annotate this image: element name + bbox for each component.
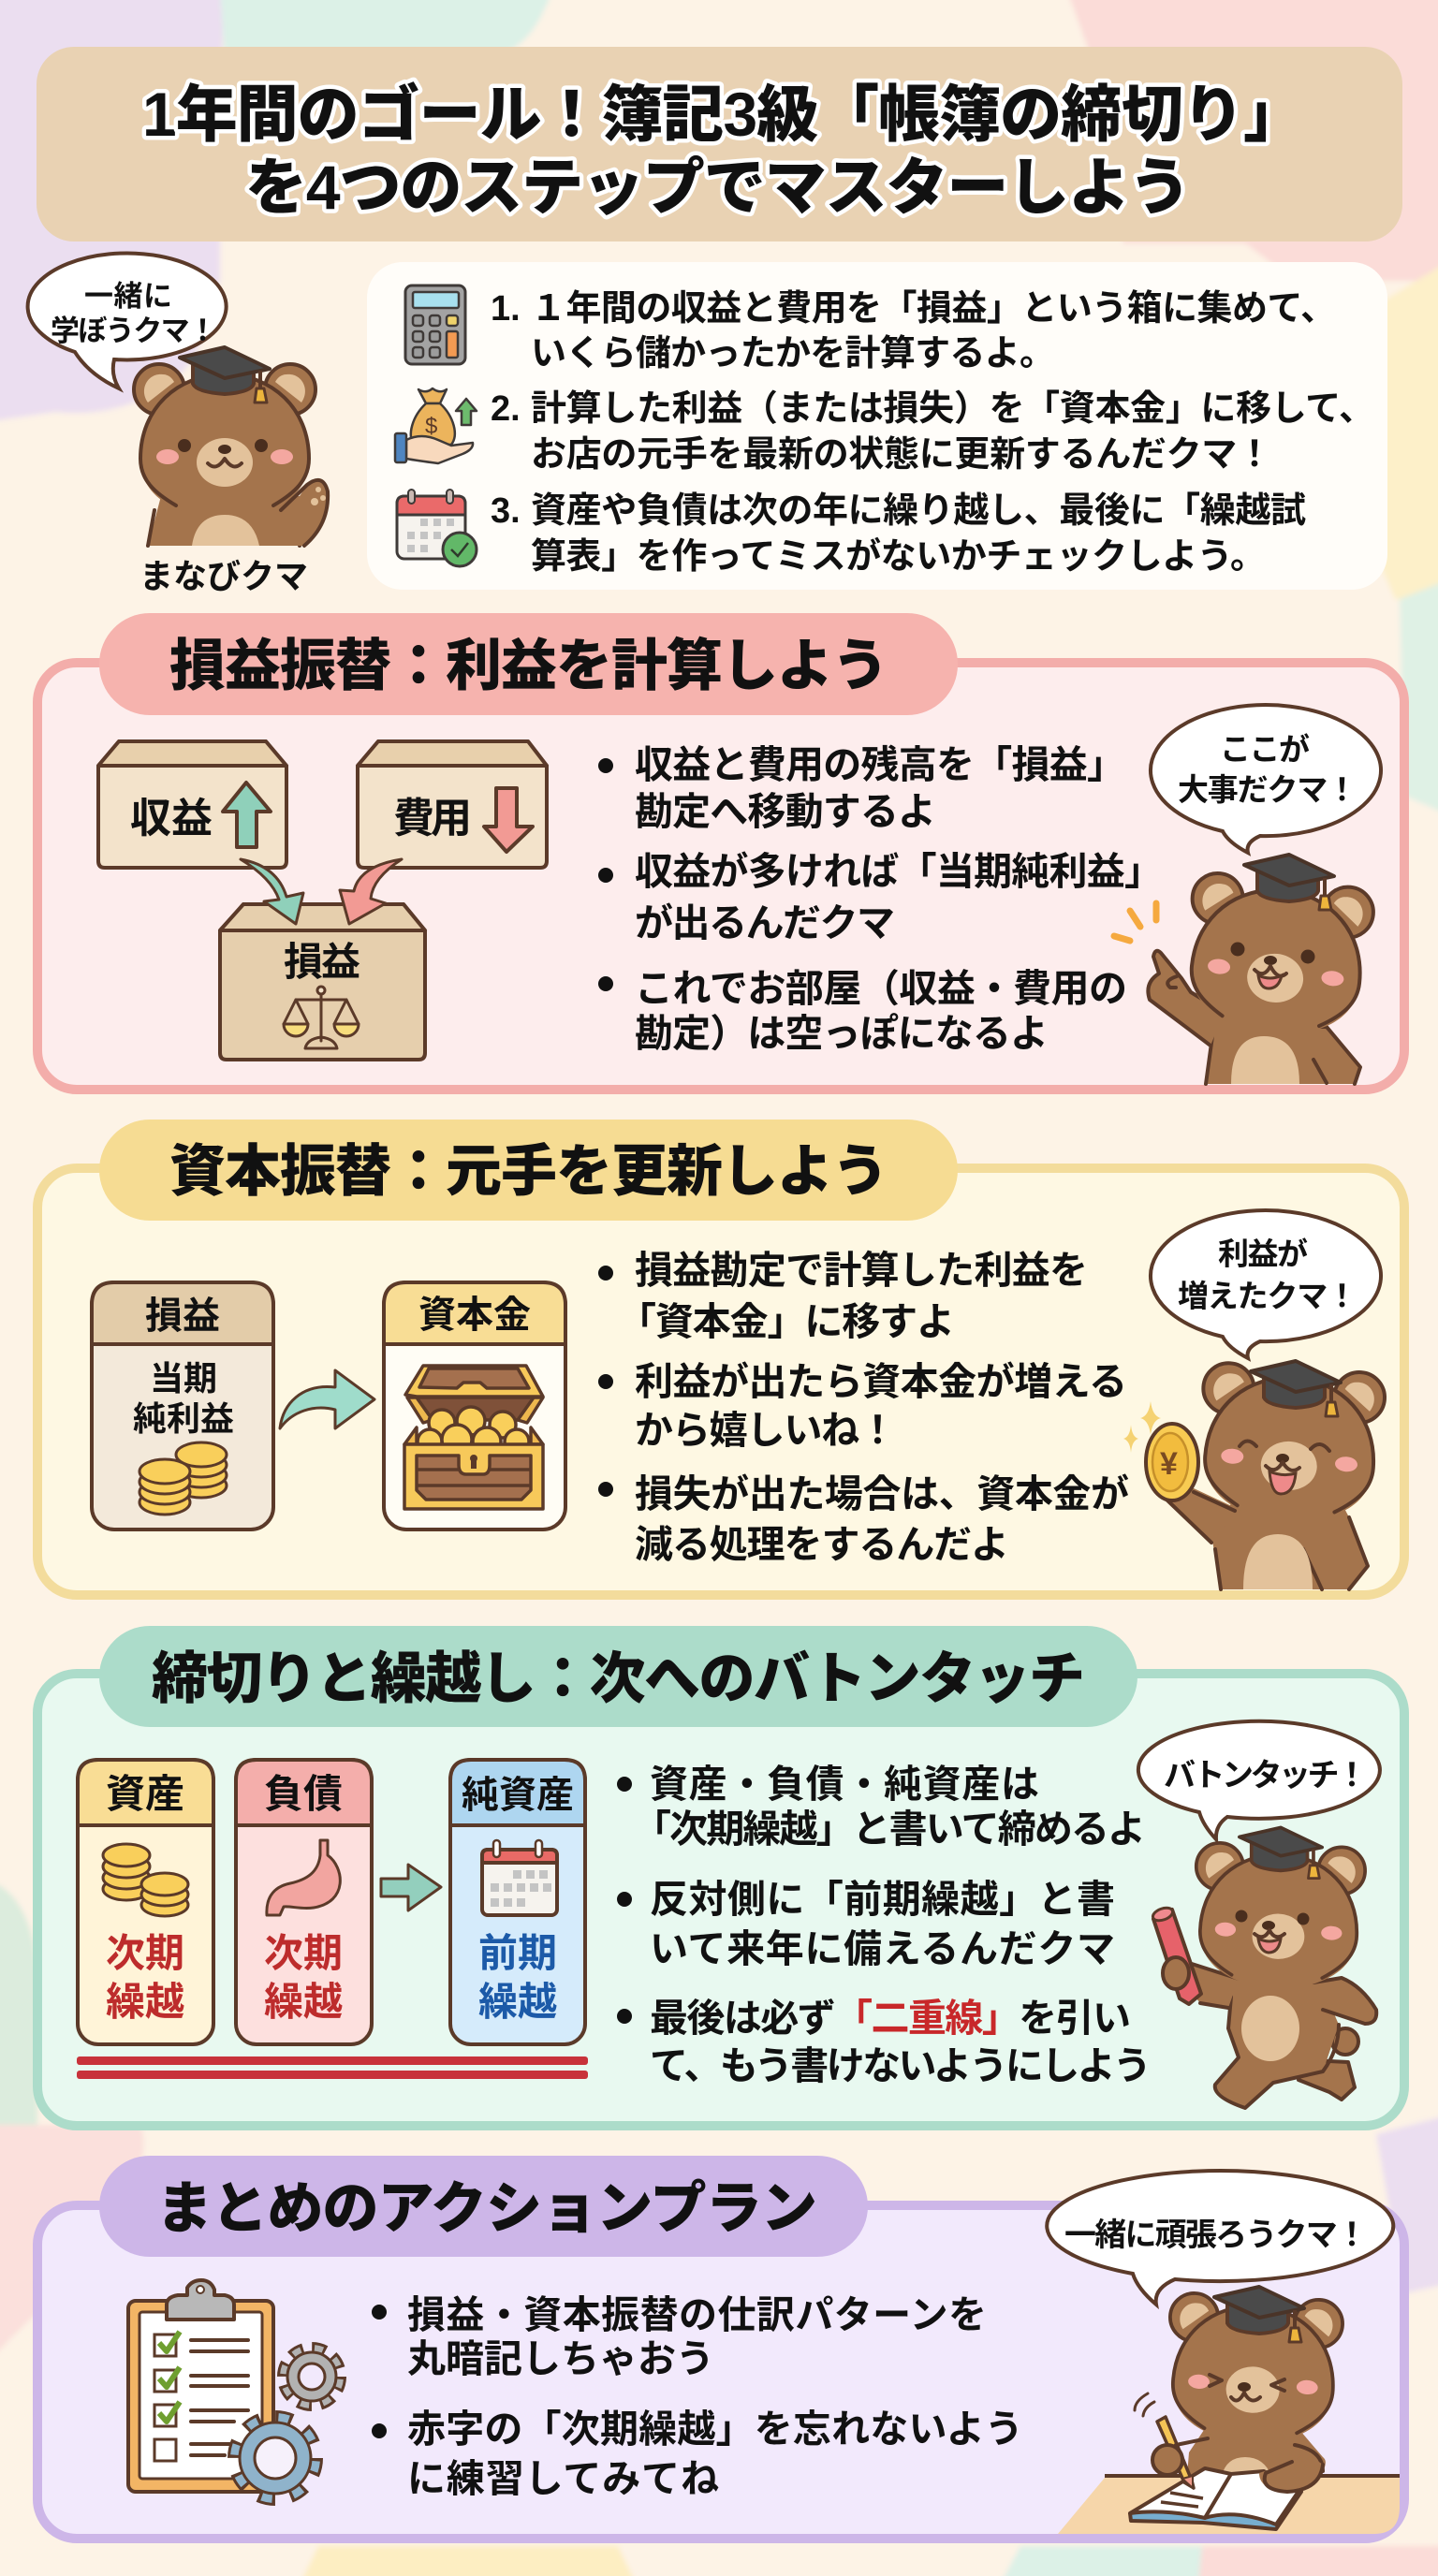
open book (1130, 2468, 1301, 2529)
icon: calculator (405, 285, 465, 364)
icon: calendar check (397, 490, 477, 566)
desk (1058, 2476, 1400, 2534)
bullet list: 「資本金」に移すよ (618, 1300, 955, 1343)
bullet list: に練習してみてね (407, 2457, 719, 2500)
heading pill (99, 1626, 1137, 1727)
arrow: 収益 to 損益 (241, 859, 303, 924)
box: 費用: 費用 (393, 796, 472, 842)
panel 4: まとめ (37, 2156, 1404, 2539)
speech bubble: バトンタッチ！ (1164, 1758, 1368, 1793)
mascot speech bubble: intro (28, 253, 227, 388)
card: 負債: 繰越 (264, 1980, 343, 2024)
card: 資産 (78, 1760, 213, 2044)
step 2 text (491, 389, 1374, 475)
step 3 text (491, 491, 1306, 577)
speech bubble: 大事だクマ！ (1178, 772, 1357, 807)
card: 資本金 (384, 1282, 565, 1530)
panel 3: 締切りと繰越し (37, 1626, 1404, 2126)
icon: blue gear (239, 2422, 312, 2495)
bullet list: 利益が出たら資本金が増える (635, 1360, 1127, 1403)
bullet list: 赤字の「次期繰越」を忘れないよう (407, 2408, 1023, 2451)
icon: money bag in hand: $ (425, 414, 437, 439)
card: 純資産: 繰越 (478, 1980, 557, 2024)
bullet list: 減る処理をするんだよ (635, 1523, 1009, 1566)
icon: balance scale (284, 987, 359, 1048)
arrow: 損益 to 資本金 (280, 1370, 374, 1428)
coins (139, 1442, 227, 1515)
yen coin: ¥ (1160, 1446, 1178, 1482)
heading pill (99, 1120, 958, 1221)
icon: gray gear (286, 2351, 337, 2402)
box: 費用 (358, 741, 547, 868)
bullet list (617, 1763, 1152, 2087)
step 3 text: 3. (491, 491, 521, 531)
mascot speech bubble: intro: 一緒に (84, 280, 172, 313)
yen coin (1146, 1424, 1198, 1500)
heading pill (99, 613, 958, 715)
bullet list: 勘定へ移動するよ (635, 790, 936, 833)
bullet list: いて来年に備えるんだクマ (650, 1927, 1115, 1970)
bullet list: これでお部屋（収益・費用の (635, 967, 1127, 1010)
box: 収益 (98, 741, 286, 868)
mascot pointing (1114, 855, 1376, 1084)
card: 損益: 損益 (145, 1295, 220, 1337)
panel 2: 資本振替 (37, 1120, 1404, 1595)
step 1 text: 1. (491, 289, 521, 329)
mascot studying (1130, 2287, 1343, 2529)
speech bubble: 増えたクマ！ (1178, 1279, 1357, 1313)
arrow: 費用 to 損益 (340, 859, 402, 924)
bullet list: 損失が出た場合は、資本金が (635, 1472, 1129, 1515)
speech bubble: ここが (1220, 732, 1310, 767)
coins (103, 1844, 188, 1916)
card: 負債: 負債 (264, 1772, 343, 1816)
card: 負債 (236, 1760, 372, 2044)
icon: money bag in hand (395, 388, 477, 463)
step 1 text: いくら儲かったかを計算するよ。 (531, 334, 1055, 373)
card: 純資産 (450, 1760, 585, 2044)
step 3 text: 資産や負債は次の年に繰り越し、最後に「繰越試 (531, 491, 1306, 531)
heading pill (99, 2156, 868, 2257)
step 3 text: 算表」を作ってミスがないかチェックしよう。 (531, 537, 1266, 577)
bullet list (598, 1249, 1129, 1566)
bullet list: 損益・資本振替の仕訳パターンを (407, 2293, 987, 2336)
heading pill: 損益振替：利益を計算しよう (169, 635, 888, 697)
speech bubble (1138, 1721, 1380, 1839)
bullet list: て、もう書けないようにしよう (650, 2044, 1152, 2087)
speech bubble (1047, 2171, 1393, 2305)
bullet list: が出るんだクマ (635, 901, 895, 944)
card: 資産: 次期 (106, 1931, 184, 1975)
mascot holding yen coin (1123, 1361, 1387, 1589)
card: 資本金: 資本金 (418, 1295, 531, 1336)
heading pill: 締切りと繰越し：次へのバトンタッチ (152, 1647, 1085, 1710)
panel: intro steps (367, 262, 1387, 590)
card: 資産: 繰越 (106, 1980, 184, 2024)
card: 純資産: 前期 (478, 1931, 557, 1975)
step 2 text: お店の元手を最新の状態に更新するんだクマ！ (531, 435, 1272, 475)
bullet list: 損益勘定で計算した利益を (635, 1249, 1088, 1292)
card: 損益: 純利益 (133, 1399, 234, 1438)
bullet list: 収益が多ければ「当期純利益」 (635, 850, 1163, 893)
bullet list: 丸暗記しちゃおう (407, 2337, 714, 2380)
pencil (1157, 2417, 1194, 2488)
title banner: 1年間のゴール！簿記3級「帳簿の締切り」 (142, 80, 1305, 149)
bullet list (598, 743, 1163, 1055)
bullet list (372, 2293, 1023, 2500)
card: 損益 (92, 1282, 273, 1530)
bullet list: 「次期繰越」と書いて締めるよ (633, 1808, 1146, 1851)
title banner (37, 47, 1402, 242)
bullet list: から嬉しいね！ (635, 1409, 897, 1452)
speech bubble: 一緒に頑張ろうクマ！ (1064, 2217, 1368, 2253)
speech bubble: 利益が (1218, 1237, 1308, 1271)
step 1 text (491, 289, 1336, 373)
bullet list: 反対側に「前期繰越」と書 (650, 1878, 1115, 1921)
mascot name: まなびクマ (139, 557, 308, 595)
bullet list: 勘定）は空っぽになるよ (635, 1012, 1049, 1055)
step 1 text: １年間の収益と費用を「損益」という箱に集めて、 (531, 289, 1336, 329)
card: 資産: 資産 (106, 1772, 184, 1816)
mascot running with baton (1152, 1827, 1376, 2108)
icon: calendar (482, 1840, 557, 1915)
card: 純資産: 純資産 (462, 1775, 574, 1816)
icon: treasure chest (404, 1366, 543, 1509)
bullet list: 最後は必ず「二重線」を引い (650, 1997, 1131, 2040)
speech bubble (1151, 1210, 1381, 1358)
speech bubble (1151, 705, 1381, 853)
sparkles (1123, 1401, 1161, 1453)
bullet list: 資産・負債・純資産は (650, 1763, 1039, 1806)
box: 収益: 収益 (130, 796, 213, 842)
icon: clipboard checklist (128, 2280, 273, 2492)
double rule (77, 2056, 588, 2079)
bullet list: 収益と費用の残高を「損益」 (635, 743, 1125, 786)
sparks (1114, 903, 1156, 941)
card: 損益: 当期 (150, 1359, 217, 1398)
icon: stomach (267, 1840, 340, 1915)
card: 負債: 次期 (264, 1931, 343, 1975)
mascot speech bubble: intro: 学ぼうクマ！ (51, 315, 217, 347)
step 2 text: 計算した利益（または損失）を「資本金」に移して、 (531, 389, 1374, 429)
panel 1: 損益振替 (37, 613, 1404, 1090)
title banner: を4つのステップでマスターしよう (245, 153, 1191, 222)
heading pill: まとめのアクションプラン (156, 2177, 817, 2240)
box: 損益: 損益 (284, 940, 360, 984)
step 2 text: 2. (491, 389, 521, 429)
box: 損益 (220, 904, 425, 1060)
mascot: まなびクマ (134, 347, 328, 595)
heading pill: 資本振替：元手を更新しよう (169, 1140, 888, 1203)
arrow to 純資産 (381, 1865, 441, 1910)
